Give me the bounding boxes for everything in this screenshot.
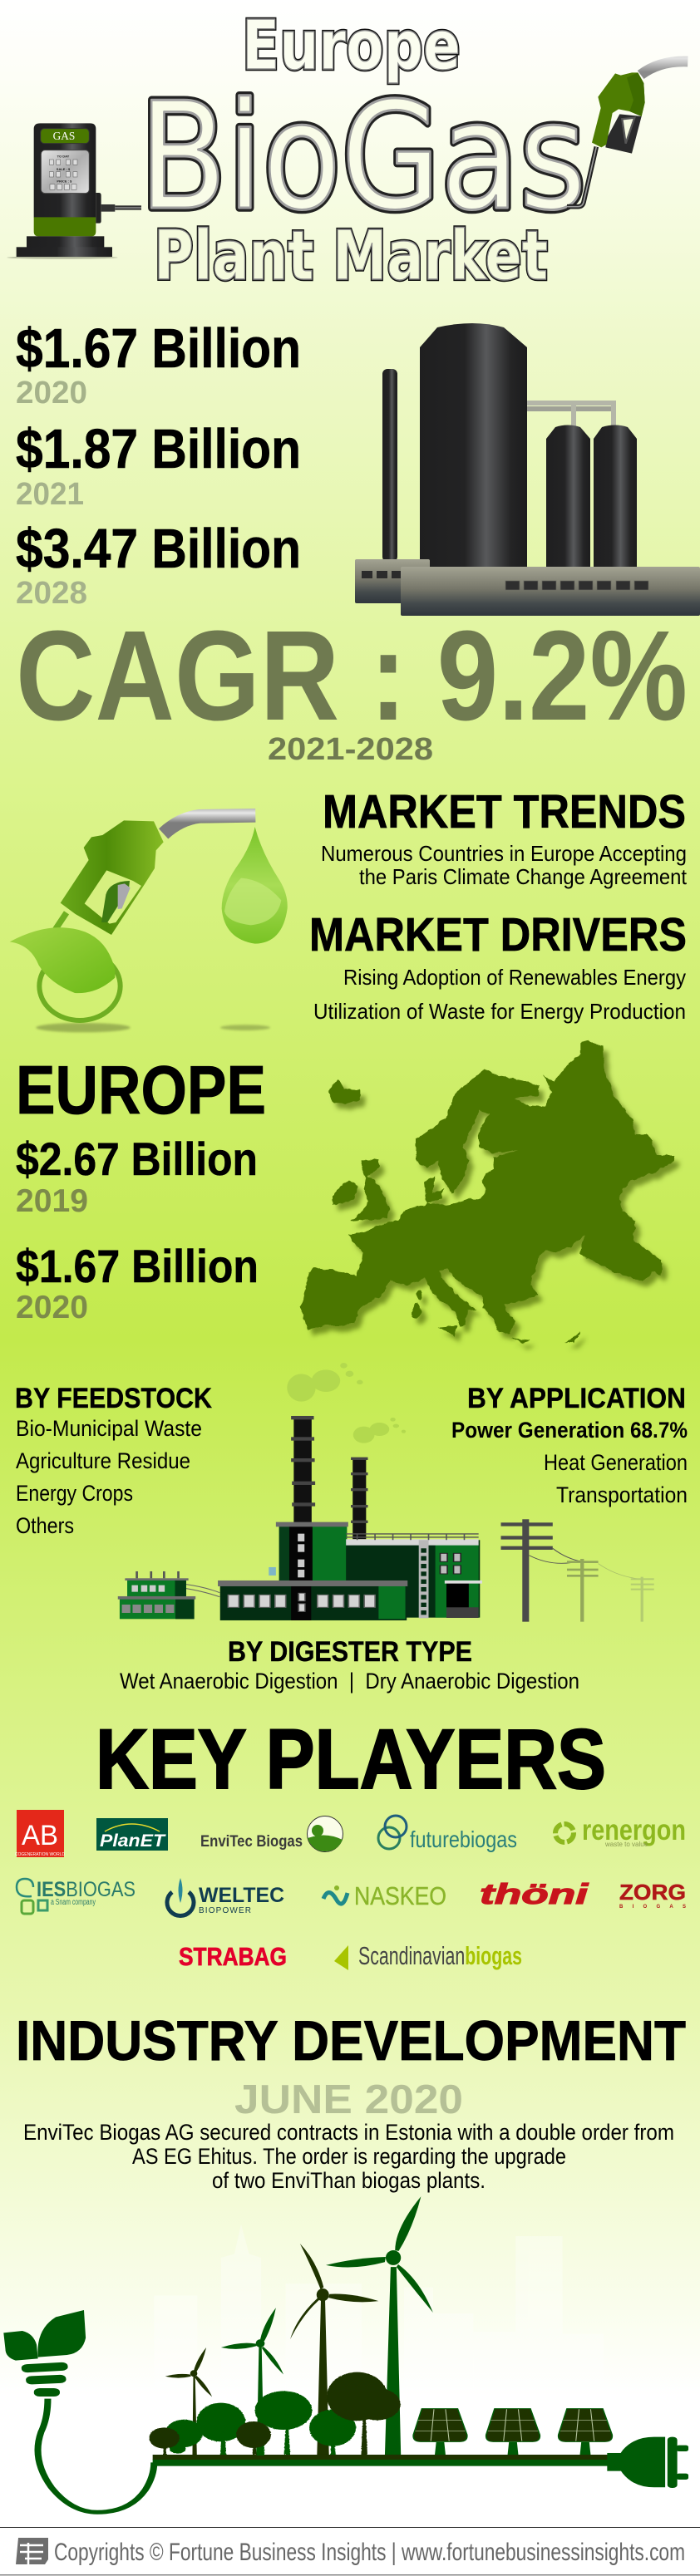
logo: Zorg Biogas: ZORG <box>619 1880 686 1905</box>
logo: IES Biogas: a Snam company <box>51 1898 96 1907</box>
illustration: eco plug with trees and solar panels <box>3 2310 688 2512</box>
drivers text <box>313 965 686 1024</box>
stat 2020: $1.67 Billion <box>16 1240 259 1292</box>
turbine 1 <box>165 2347 212 2456</box>
illustration: wind turbines <box>165 2196 433 2456</box>
logo: PlanET: PlanET <box>100 1831 166 1851</box>
panel: industry development <box>16 2009 686 2193</box>
development text: AS EG Ehitus. The order is regarding the upgrade <box>132 2144 566 2169</box>
illustration: biogas tanks <box>355 323 700 616</box>
title: Europe BioGas Plant Market <box>139 7 586 296</box>
globe <box>58 2411 145 2487</box>
logo: EnviTec Biogas: EnviTec Biogas <box>200 1833 303 1851</box>
illustration: faint city skyline <box>154 2225 604 2451</box>
stat 2019: 2019 <box>16 1183 88 1219</box>
logo: Naskeo <box>323 1881 446 1910</box>
dark trees <box>149 2372 401 2455</box>
heading: by feedstock: BY FEEDSTOCK <box>15 1383 212 1414</box>
logo: futurebiogas: futurebiogas <box>410 1826 517 1852</box>
stat 2021 <box>16 418 301 512</box>
icon: gas pump: GAS <box>53 130 75 142</box>
logo: PlanET <box>96 1818 168 1851</box>
feedstock list: Bio-Municipal Waste <box>16 1416 202 1441</box>
logo: Thoni: thöni <box>480 1879 589 1910</box>
panel: by feedstock <box>15 1383 212 1538</box>
electric plug <box>607 2437 688 2488</box>
footer <box>0 2527 700 2576</box>
solar panel 1 <box>413 2409 467 2455</box>
stat: market size values <box>16 317 301 611</box>
trend text <box>321 841 688 889</box>
panel: by application <box>451 1383 688 1507</box>
development text: of two EnviThan biogas plants. <box>212 2168 486 2193</box>
stat 2019 <box>16 1133 258 1219</box>
stat 2028: 2028 <box>16 576 87 611</box>
bulb leaves <box>3 2310 86 2397</box>
logo: AB: AB <box>22 1820 58 1851</box>
icon: gas pump: PRICE : $ <box>57 179 72 183</box>
plug cable <box>38 2399 154 2512</box>
icon: gas pump: SALE : $ <box>57 167 71 171</box>
stat 2020 <box>16 1240 259 1325</box>
logo: Zorg Biogas: BIOGAS <box>619 1905 686 1910</box>
title line: BioGas tube lettering: BioGas <box>139 71 586 243</box>
turbine 4 <box>326 2196 433 2456</box>
green trees <box>165 2391 356 2456</box>
stat 2028: $3.47 Billion <box>16 518 301 580</box>
panel: market trends <box>321 785 688 889</box>
application list <box>451 1418 688 1507</box>
heading: key players: KEY PLAYERS <box>96 1712 606 1807</box>
turbine 3 <box>290 2244 378 2456</box>
heading: Europe: EUROPE <box>16 1051 266 1128</box>
feedstock list: Agriculture Residue <box>16 1448 190 1473</box>
logo: AB <box>15 1810 65 1857</box>
grass <box>153 2455 608 2460</box>
logo: EnviTec Biogas <box>200 1816 343 1851</box>
logo: Weltec Biopower: WELTEC <box>199 1884 284 1907</box>
icon: gas pump <box>7 123 141 259</box>
stat 2020: 2020 <box>16 376 87 410</box>
stat 2021: 2021 <box>16 477 84 512</box>
logo: Weltec Biopower <box>167 1878 284 1915</box>
feedstock list: Others <box>16 1513 74 1538</box>
heading: by digester type: BY DIGESTER TYPE <box>228 1636 472 1668</box>
date: June 2020: JUNE 2020 <box>234 2077 463 2122</box>
logo: AB: COGENERATION WORLD <box>15 1852 65 1857</box>
stat 2019: $2.67 Billion <box>16 1133 258 1185</box>
title line: Plant Market: Plant Market <box>154 217 548 296</box>
feedstock list <box>16 1416 202 1538</box>
panel: by digester type <box>120 1636 579 1694</box>
trees <box>149 2372 401 2456</box>
stat 2020 <box>16 317 301 410</box>
stat 2028 <box>16 518 301 611</box>
heading: by application: BY APPLICATION <box>467 1383 686 1414</box>
title line: BioGas tube lettering: BioGas <box>139 71 586 243</box>
development text <box>23 2120 674 2193</box>
logo: renergon <box>555 1814 686 1848</box>
panel: Europe stats <box>16 1051 266 1325</box>
icon: fuel nozzle with hose <box>567 61 688 207</box>
logo: renergon: waste to value <box>604 1841 648 1848</box>
CAGR period: 2021-2028 <box>268 732 433 767</box>
stat 2020: $1.67 Billion <box>16 317 301 380</box>
panel: key player logos <box>15 1810 686 1971</box>
title line: Europe: Europe <box>242 7 461 86</box>
logo: Scandinavian Biogas: Scandinavianbiogas <box>358 1941 522 1970</box>
logo: futurebiogas <box>378 1816 517 1852</box>
stat 2020: 2020 <box>16 1290 88 1325</box>
logo: Strabag: STRABAG <box>179 1942 287 1971</box>
turbine 2 <box>221 2308 283 2456</box>
illustration: factory and power lines <box>118 1363 654 1622</box>
title line: Plant Market: Plant Market <box>154 217 548 296</box>
solar panel 3 <box>559 2409 612 2455</box>
application list: Transportation <box>556 1482 688 1507</box>
icon: gas pump: TO DAY <box>57 154 70 158</box>
panel: market drivers <box>309 908 687 1024</box>
logo: Weltec Biopower: BIOPOWER <box>199 1906 251 1915</box>
logo: IES Biogas <box>17 1878 136 1914</box>
feedstock list: Energy Crops <box>16 1481 133 1506</box>
solar panel 2 <box>486 2409 540 2455</box>
logo: Naskeo: NASKEO <box>354 1881 446 1910</box>
footer logo <box>16 2538 48 2564</box>
illustration: green nozzle, leaf and drop <box>10 815 288 1032</box>
logo: IES Biogas: IESBIOGAS <box>37 1878 136 1901</box>
map: Europe <box>301 1041 675 1344</box>
stat 2021: $1.87 Billion <box>16 418 301 480</box>
digester list: Wet Anaerobic Digestion | Dry Anaerobic Digestion <box>120 1669 579 1694</box>
title line: Europe: Europe <box>242 7 461 86</box>
